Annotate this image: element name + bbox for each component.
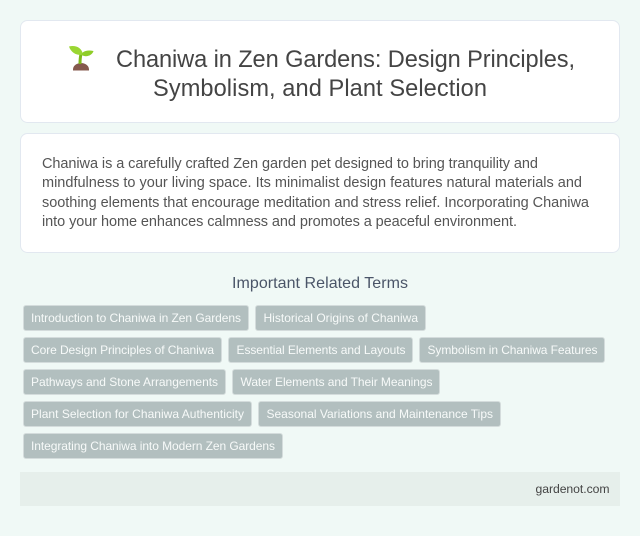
tag: Essential Elements and Layouts [236, 343, 406, 357]
icon: seedling [69, 46, 94, 70]
tag: Integrating Chaniwa into Modern Zen Gardens [31, 439, 275, 453]
panel: title [20, 20, 620, 122]
description text [42, 156, 590, 230]
tag: Historical Origins of Chaniwa [264, 311, 418, 325]
tag: Symbolism in Chaniwa Features [428, 343, 598, 357]
tag [24, 434, 282, 458]
tag [228, 338, 412, 362]
tag [24, 370, 226, 394]
tag: Pathways and Stone Arrangements [31, 375, 218, 389]
tag: Plant Selection for Chaniwa Authenticity [31, 407, 244, 421]
description text: into your home enhances calmness and promotes a peaceful environment. [42, 214, 517, 230]
tag [24, 338, 222, 362]
tag [24, 402, 252, 426]
panel: description [20, 134, 620, 252]
description text: Chaniwa is a carefully crafted Zen garden pet designed to bring tranquility and [42, 156, 538, 172]
tag: Water Elements and Their Meanings [240, 375, 432, 389]
title text [116, 47, 575, 102]
footer source text: gardenot.com [536, 482, 610, 496]
tag list [24, 306, 604, 458]
tag: Seasonal Variations and Maintenance Tips [266, 407, 493, 421]
tag [24, 306, 248, 330]
tag [232, 370, 440, 394]
tag [258, 402, 500, 426]
description text: mindfulness to your living space. Its minimalist design features natural materials and [42, 175, 582, 191]
title text: Symbolism, and Plant Selection [153, 76, 487, 102]
tag [420, 338, 604, 362]
tag: Introduction to Chaniwa in Zen Gardens [31, 311, 241, 325]
title text: Chaniwa in Zen Gardens: Design Principles, [116, 47, 575, 73]
tag [256, 306, 426, 330]
description text: soothing elements that encourage meditation and stress relief. Incorporating Chaniwa [42, 195, 590, 211]
footer [20, 472, 620, 506]
tag: Core Design Principles of Chaniwa [31, 343, 214, 357]
heading: important related terms: Important Related Terms [232, 275, 408, 292]
